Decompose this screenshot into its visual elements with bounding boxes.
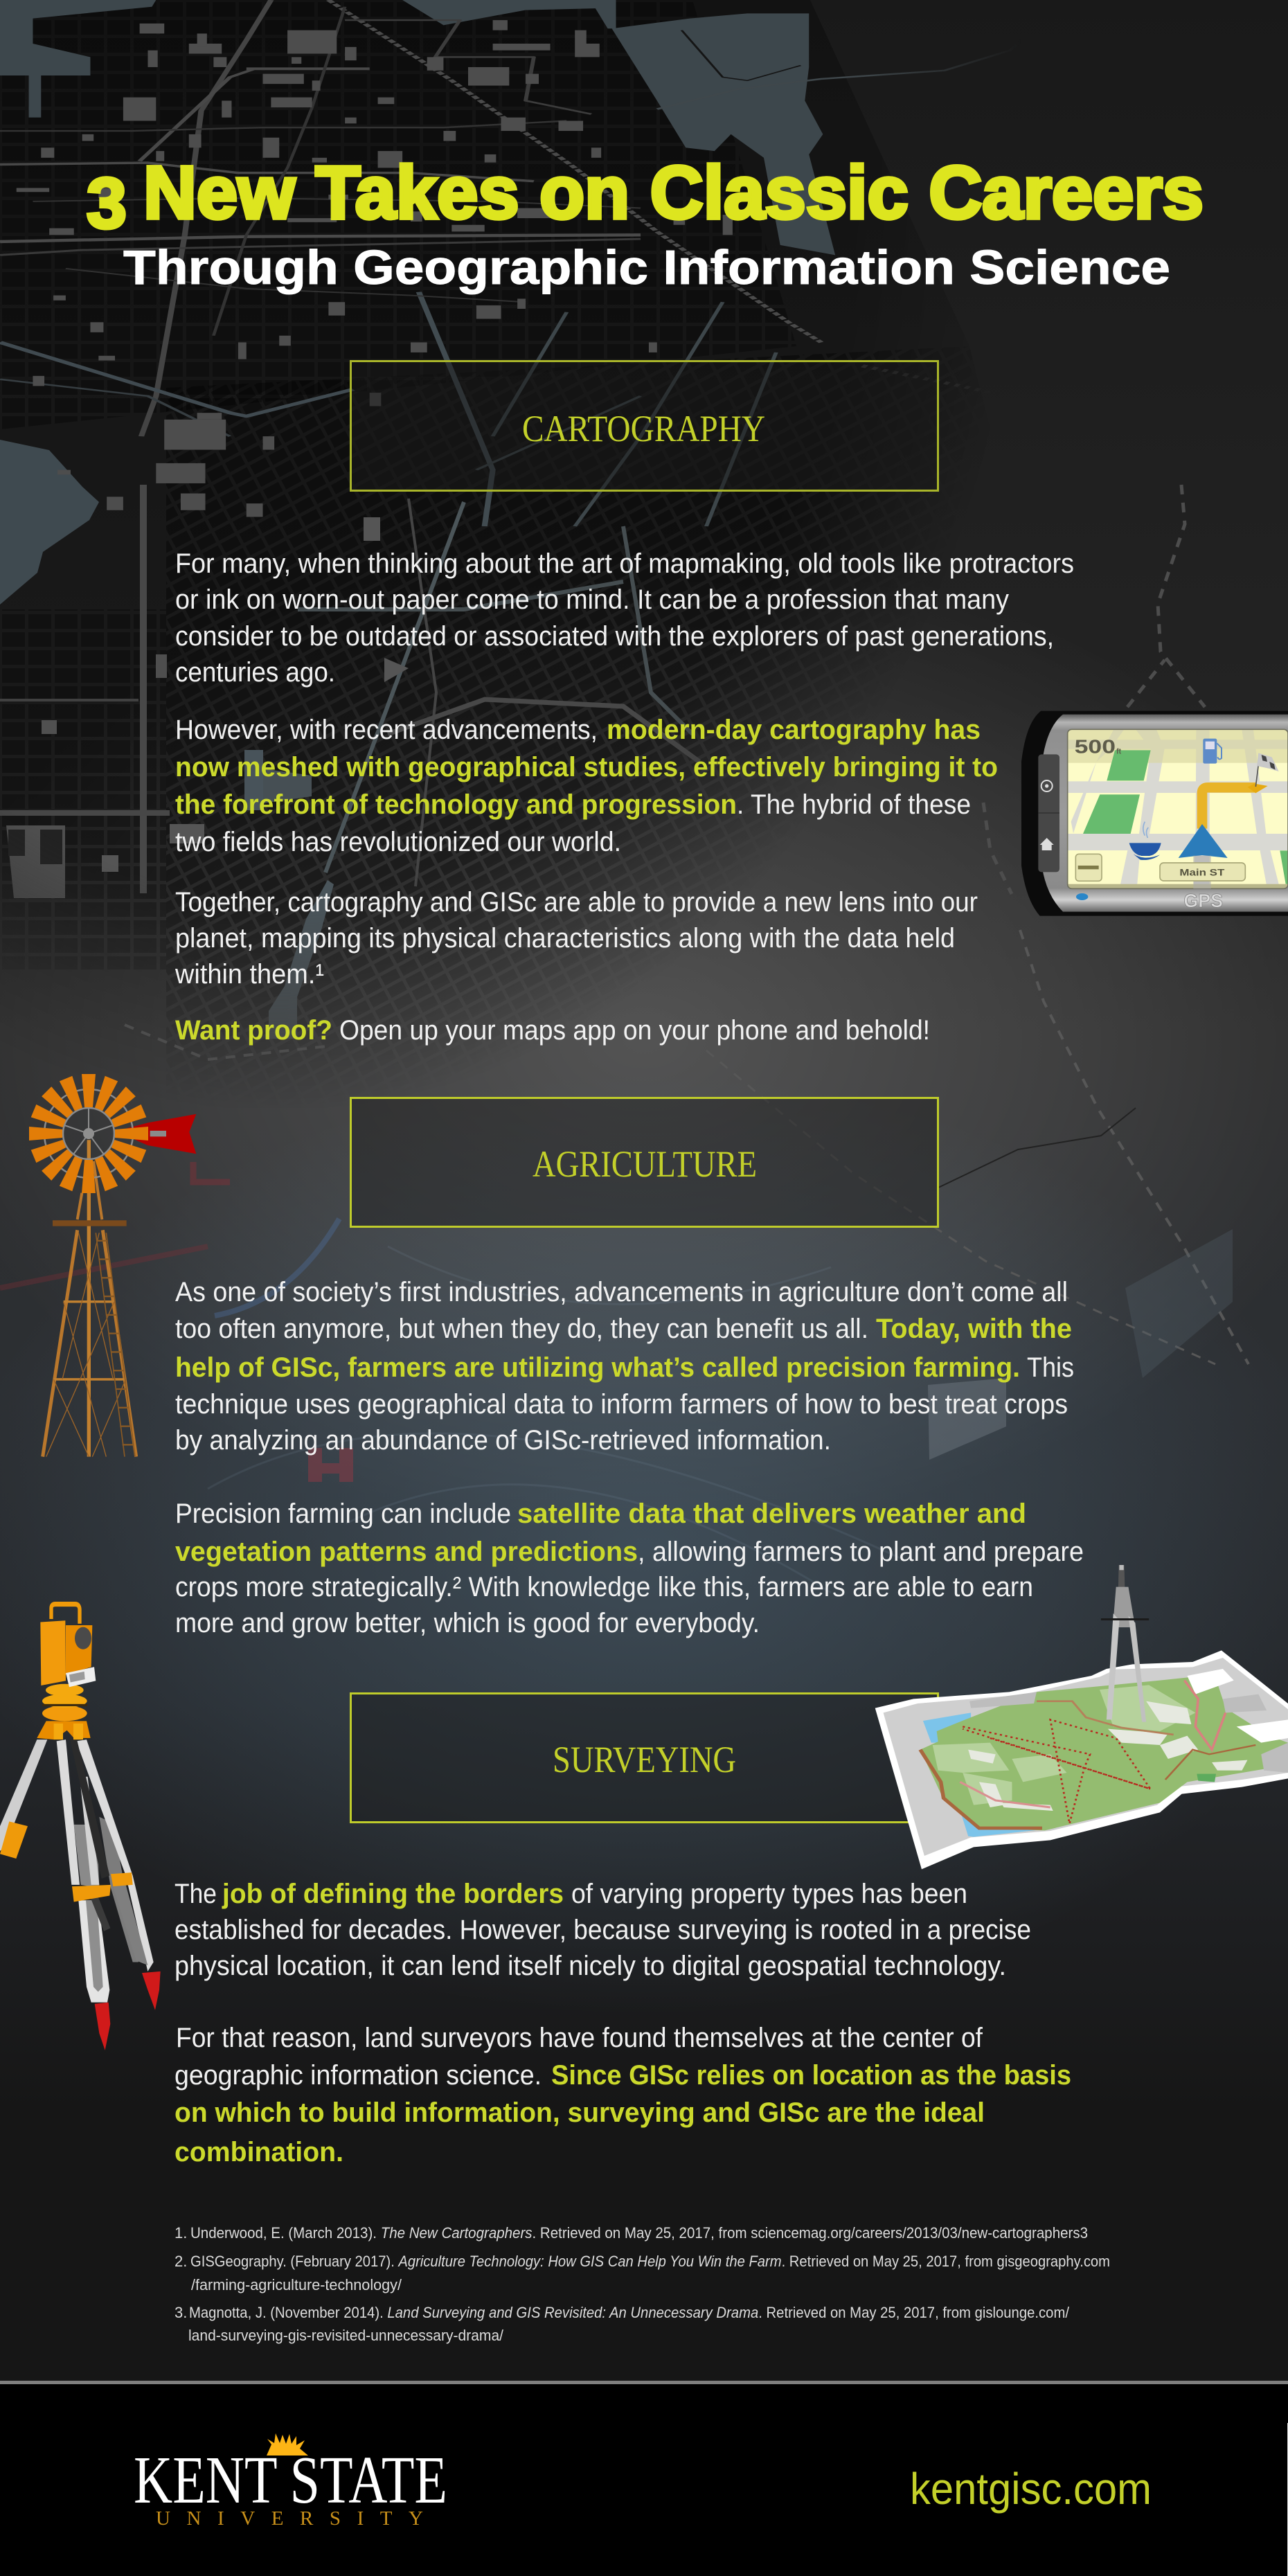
- text block: cartography: consider to be outdated or associated with the explorers of past generations,: [175, 621, 1054, 652]
- text block: surveying: For that reason, land surveyors have found themselves at the center of: [176, 2023, 983, 2053]
- text block: cartography: For many, when thinking about the art of mapmaking, old tools like protractors: [175, 548, 1074, 579]
- logo university line: UNIVERSITY: [156, 2507, 423, 2530]
- compass: [1101, 1565, 1149, 1722]
- text block: agriculture: by analyzing an abundance of GISc-retrieved information.: [175, 1425, 831, 1456]
- icon: GPS device: [1021, 711, 1288, 916]
- text block: agriculture: too often anymore, but when they do, they can benefit us all.: [175, 1314, 868, 1344]
- text block: agriculture: satellite data that delivers weather and: [517, 1499, 1026, 1529]
- text block: surveying: established for decades. However, because surveying is rooted in a precise: [175, 1915, 1031, 1945]
- map borders and roads: [920, 1681, 1255, 1828]
- logo sunburst: [267, 2433, 308, 2456]
- text block: cartography: [175, 548, 1074, 1046]
- title line yellow: New Takes on Classic Careers: [143, 150, 1204, 234]
- text block: surveying: Since GISc relies on location as the basis: [551, 2060, 1071, 2091]
- windmill wheel: [29, 1074, 148, 1193]
- text block: agriculture: help of GISc, farmers are utilizing what’s called precision farming.: [175, 1352, 1020, 1383]
- title: [87, 150, 1204, 294]
- text block: surveying: combination.: [175, 2137, 343, 2167]
- footnotes: 2.: [175, 2253, 187, 2270]
- text block: surveying: [175, 1879, 1071, 2167]
- icon: folded map with compass: [875, 1565, 1288, 1869]
- footer band: [0, 2381, 1288, 2576]
- GPS minus button: [1075, 854, 1102, 881]
- instrument head: [37, 1721, 91, 1739]
- footnotes: [175, 2224, 1110, 2344]
- text block: surveying: job of defining the borders: [222, 1879, 564, 1909]
- heading: surveying: SURVEYING: [553, 1739, 736, 1780]
- text block: agriculture: , allowing farmers to plant and prepare: [638, 1537, 1084, 1567]
- heading: cartography: [350, 361, 938, 490]
- text block: agriculture: Today, with the: [876, 1314, 1072, 1344]
- GPS fuel pump: [1203, 739, 1222, 764]
- footnotes: GISGeography. (February 2017). Agriculture Technology: How GIS Can Help You Win the Farm. Retrieved on May 25, 2017, from gisgeography.com: [190, 2253, 1110, 2270]
- text block: agriculture: crops more strategically.² With knowledge like this, farmers are able to earn: [175, 1572, 1033, 1602]
- tripod legs: [0, 1739, 47, 1851]
- map land: [920, 1674, 1288, 1830]
- heading: agriculture: [350, 1098, 938, 1227]
- title number 3: 3: [87, 163, 127, 243]
- text block: agriculture: more and grow better, which is good for everybody.: [175, 1608, 760, 1638]
- footnotes: 3.: [175, 2304, 187, 2321]
- website link: kentgisc.com: [910, 2464, 1152, 2514]
- text block: cartography: . The hybrid of these: [737, 789, 971, 820]
- background city map: [0, 0, 992, 1064]
- text block: agriculture: Precision farming can include: [175, 1499, 511, 1529]
- GPS side buttons: [1038, 754, 1059, 872]
- icon: GPS device: ft: [1116, 747, 1122, 755]
- subtitle: Through Geographic Information Science: [123, 240, 1170, 294]
- GPS arrow: [1179, 824, 1228, 858]
- text block: surveying: on which to build information, surveying and GISc are the ideal: [175, 2098, 985, 2128]
- tripod red tips: [95, 2003, 110, 2050]
- text block: surveying: physical location, it can lend itself nicely to digital geospatial technology.: [175, 1951, 1006, 1981]
- text block: cartography: within them.¹: [175, 959, 324, 990]
- text block: cartography: However, with recent advancements,: [175, 715, 598, 745]
- GPS street label: [1160, 863, 1245, 881]
- text block: agriculture: As one of society’s first industries, advancements in agriculture don’t come all: [175, 1277, 1068, 1307]
- text block: cartography: Want proof?: [175, 1015, 332, 1046]
- text block: cartography: centuries ago.: [175, 657, 335, 688]
- heading: surveying: [350, 1694, 938, 1823]
- footnotes: 1.: [175, 2224, 187, 2242]
- footnotes: land-surveying-gis-revisited-unnecessary-drama/: [188, 2327, 504, 2344]
- GPS street label: Main ST: [1179, 866, 1225, 877]
- icon: surveying tripod: [0, 1604, 161, 2050]
- map sea: [923, 1712, 971, 1743]
- GPS coffee cup: [1129, 822, 1161, 860]
- logo: Kent State University: [134, 2433, 447, 2530]
- heading: cartography: CARTOGRAPHY: [522, 408, 765, 449]
- text block: cartography: Open up your maps app on your phone and behold!: [339, 1015, 930, 1046]
- windmill tower: [43, 1140, 136, 1457]
- text block: cartography: or ink on worn-out paper come to mind. It can be a profession that many: [175, 584, 1009, 615]
- text block: surveying: of varying property types has been: [571, 1879, 967, 1909]
- GPS distance label: 500: [1075, 736, 1116, 758]
- map sheet: [875, 1650, 1288, 1869]
- footnotes: /farming-agriculture-technology/: [191, 2276, 402, 2293]
- text block: cartography: modern-day cartography has: [607, 715, 981, 745]
- footnotes: Magnotta, J. (November 2014). Land Surveying and GIS Revisited: An Unnecessary Drama. Retrieved on May 25, 2017, from gislounge.com/: [189, 2304, 1070, 2321]
- text block: cartography: Together, cartography and GISc are able to provide a new lens into our: [175, 887, 978, 918]
- text block: cartography: now meshed with geographical studies, effectively bringing it to: [175, 752, 998, 782]
- text block: agriculture: This: [1027, 1352, 1074, 1383]
- windmill vane: [118, 1114, 196, 1154]
- footnotes: Underwood, E. (March 2013). The New Cartographers. Retrieved on May 25, 2017, from sciencemag.org/careers/2013/03/new-cartographers3: [190, 2224, 1088, 2242]
- text block: cartography: planet, mapping its physical characteristics along with the data held: [175, 923, 955, 954]
- text block: cartography: two fields has revolutionized our world.: [175, 827, 621, 857]
- text block: agriculture: [175, 1277, 1084, 1638]
- icon: windmill: [29, 1074, 196, 1457]
- text block: surveying: geographic information science.: [175, 2060, 542, 2091]
- heading: agriculture: AGRICULTURE: [533, 1143, 757, 1185]
- logo wordmark: KENT STATE: [134, 2443, 447, 2517]
- text block: agriculture: vegetation patterns and predictions: [175, 1537, 638, 1567]
- GPS finish flag: [1255, 753, 1279, 787]
- dashed roads and faint weather overlays: [0, 485, 1249, 1593]
- GPS brand: GPS: [1183, 890, 1223, 911]
- text block: surveying: The: [175, 1879, 217, 1909]
- text block: cartography: the forefront of technology and progression: [175, 789, 737, 820]
- text block: agriculture: technique uses geographical data to inform farmers of how to best treat crops: [175, 1389, 1068, 1420]
